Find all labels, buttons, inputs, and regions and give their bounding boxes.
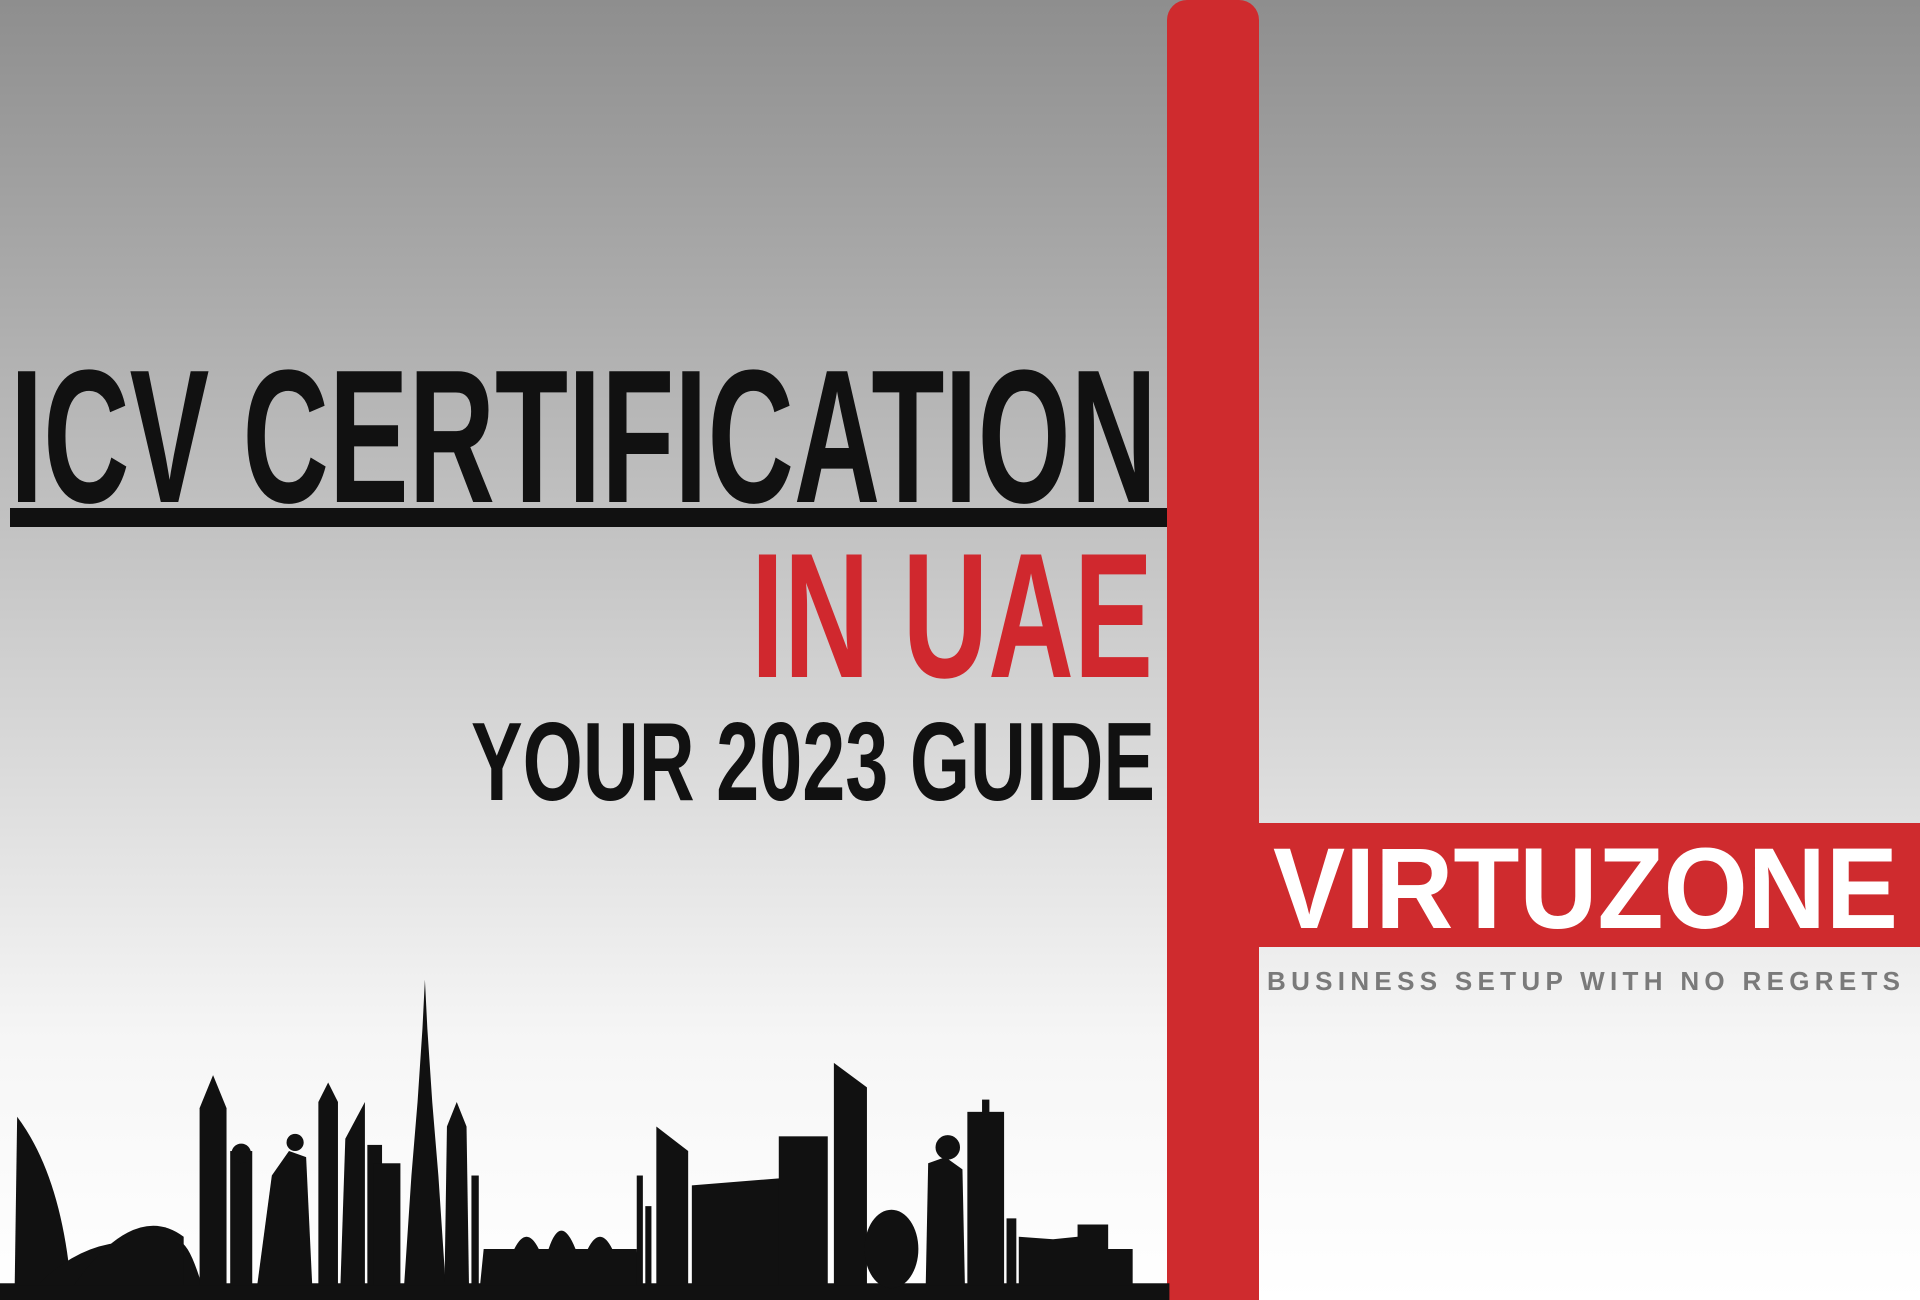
subtitle: IN UAE: IN UAE [751, 516, 1153, 715]
red vertical bar [1167, 0, 1259, 1300]
title: ICV CERTIFICATION [10, 331, 1167, 543]
title: ICV CERTIFICATION: ICV CERTIFICATION [10, 331, 1157, 543]
tagline: BUSINESS SETUP WITH NO REGRETS [1267, 966, 1900, 996]
logo banner: VIRTUZONE: VIRTUZONE [1273, 825, 1898, 953]
subtitle: YOUR 2023 GUIDE: YOUR 2023 GUIDE [471, 700, 1155, 824]
skyline silhouette [0, 980, 1169, 1300]
